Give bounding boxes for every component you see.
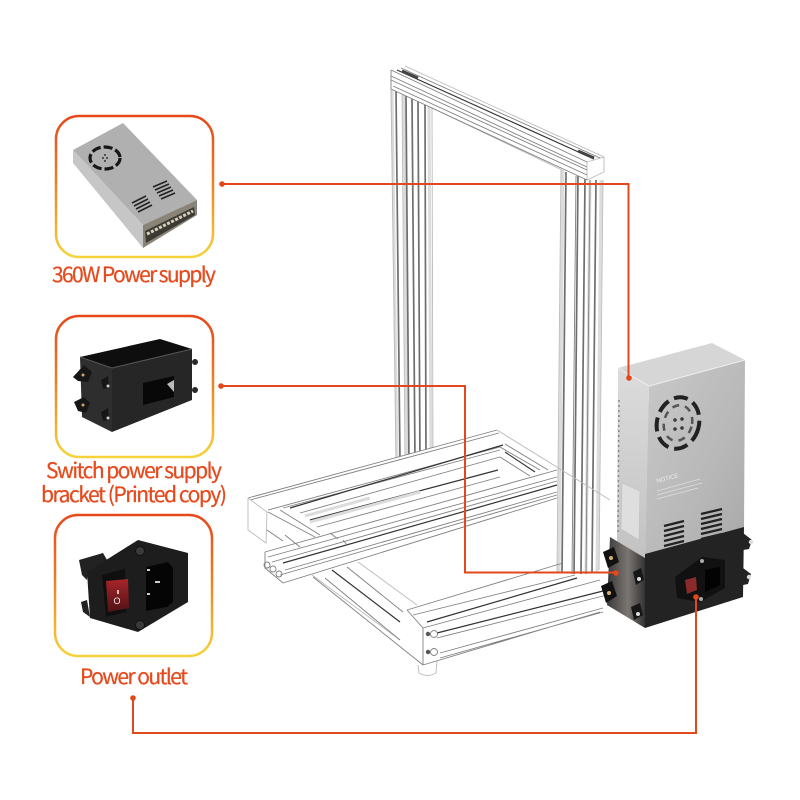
rating label: [621, 483, 640, 540]
rubber foot: [418, 661, 437, 676]
aluminium printer frame: [248, 66, 610, 676]
fan: [90, 147, 120, 169]
label: power outlet: Power outlet: [80, 661, 188, 691]
left side base beam: [312, 562, 423, 665]
notice text: NOTICE: [656, 473, 679, 485]
icon: black printed bracket: [73, 339, 198, 432]
panel: bracket: [56, 316, 213, 457]
label: bracket: Switch power supply: [46, 455, 222, 485]
side clamp knobs: [601, 547, 619, 603]
connector line: power outlet: [130, 594, 699, 733]
top crossbeam: [391, 66, 604, 180]
mounting ears: [743, 533, 752, 585]
notice text: [656, 473, 702, 499]
fan grille: [651, 392, 705, 454]
assembled power outlet: [675, 557, 725, 602]
icon: power supply photo: [73, 123, 197, 248]
front crossbar of upper frame: [264, 470, 557, 583]
right upright extrusion: [557, 170, 603, 574]
label: bracket: [41, 455, 227, 509]
rear base beam: [248, 430, 610, 556]
assembled power unit on the frame: [601, 343, 753, 628]
label: power supply: 360W Power supply: [52, 259, 216, 289]
panel: power supply: [56, 116, 213, 257]
label: bracket: bracket (Printed copy): [41, 479, 227, 509]
left upright extrusion: [391, 89, 433, 466]
connector line: power supply: [219, 181, 632, 381]
assembled bracket: [601, 527, 753, 628]
vent slots: [664, 509, 722, 551]
assembled power supply: [617, 343, 745, 560]
icon: power outlet photo: O: [113, 596, 121, 606]
panel: power outlet: [55, 515, 212, 656]
front base beam: [407, 563, 607, 665]
vents: [132, 181, 175, 212]
icon: power outlet photo: [79, 540, 188, 632]
connector line: bracket: [218, 383, 619, 576]
